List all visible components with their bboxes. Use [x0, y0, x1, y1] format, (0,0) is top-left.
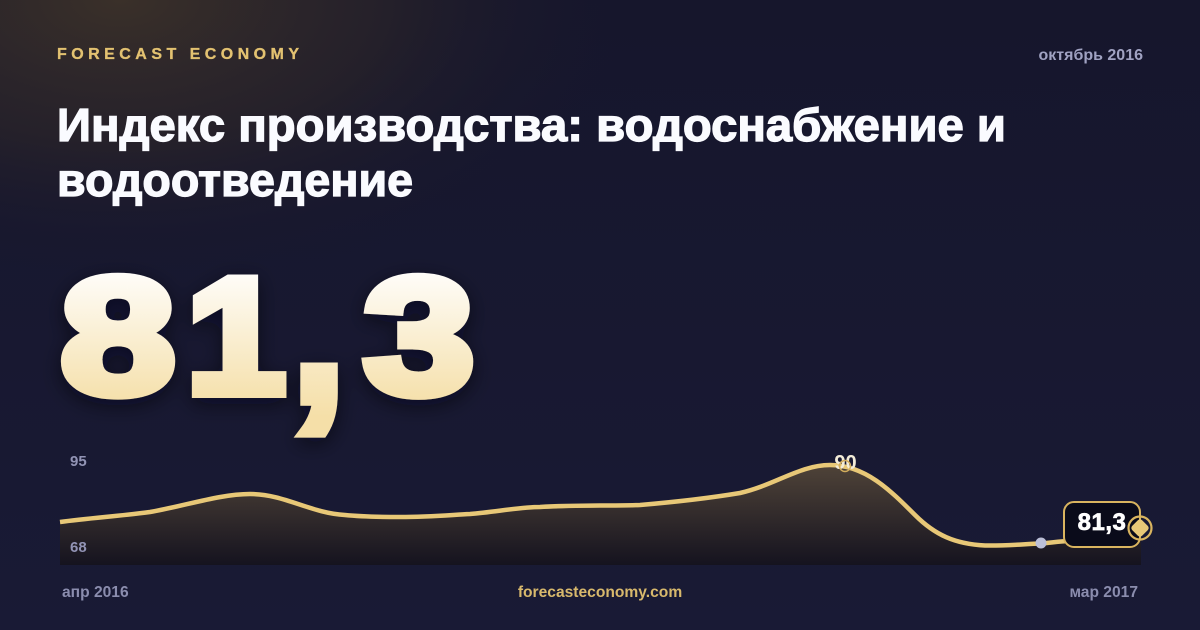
big value — [61, 212, 474, 444]
chart: area under line — [60, 465, 1141, 565]
axis labels: y scale: 95 — [70, 453, 87, 470]
axis label: start: апр 2016 — [62, 584, 129, 601]
recent point marker — [1036, 538, 1046, 548]
title: Индекс производства: водоснабжение и — [57, 99, 1006, 151]
axis labels: y scale: 68 — [70, 539, 87, 556]
title — [57, 99, 1006, 206]
peak marker with label: 90 — [834, 452, 857, 474]
big value: 1 — [186, 244, 286, 428]
source link: forecasteconomy.com — [518, 584, 682, 601]
big value: 8 — [61, 244, 175, 428]
axis label: end: мар 2017 — [1069, 584, 1138, 601]
axis labels: y scale — [70, 453, 87, 556]
date label: октябрь 2016 — [1039, 47, 1143, 64]
callout: latest value — [1064, 502, 1140, 547]
big value: 3 — [363, 243, 474, 428]
callout: latest value: 81,3 — [1078, 509, 1126, 536]
title: водоотведение — [57, 154, 413, 206]
chart: line — [60, 465, 1070, 546]
latest point marker — [1128, 516, 1152, 540]
big value: , — [293, 212, 345, 444]
brand label: FORECAST ECONOMY — [57, 46, 299, 63]
